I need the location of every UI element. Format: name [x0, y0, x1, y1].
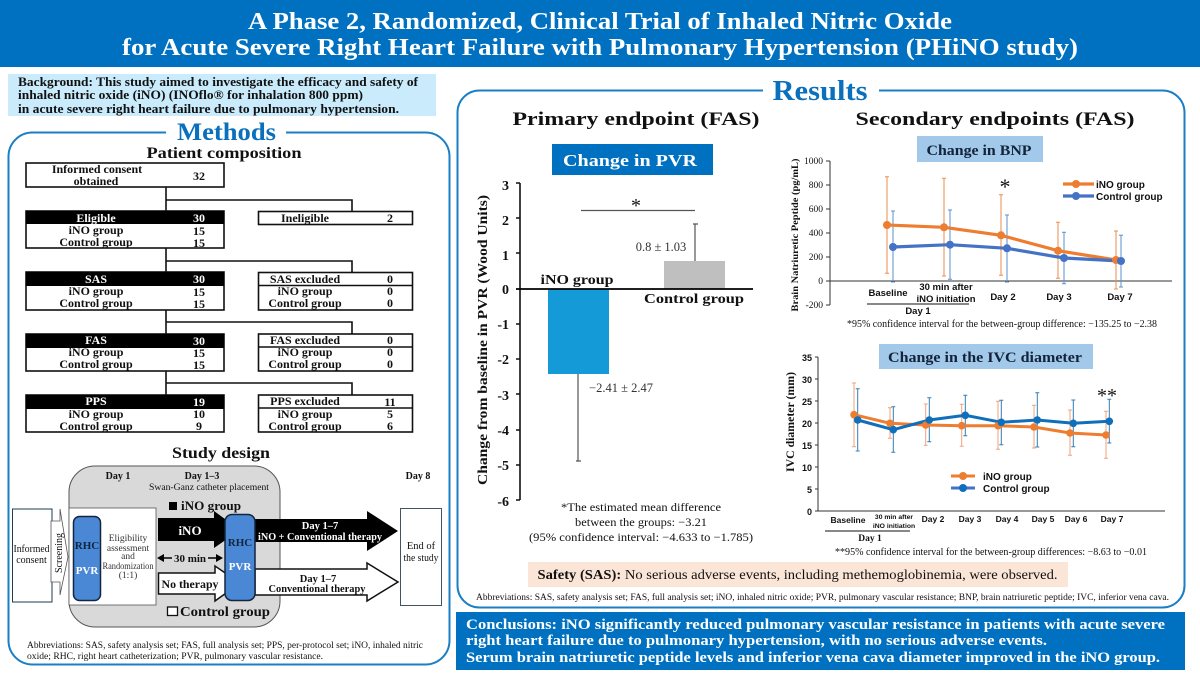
flow chart: patient composition: SAS excluded	[270, 272, 340, 286]
flow chart: patient composition: Control group	[268, 419, 342, 433]
diagram: study design: PVR	[229, 561, 252, 573]
diagram: study design: assessment	[107, 544, 149, 554]
conclusions: Serum brain natriuretic peptide levels and inferior vena cava diameter improved in the iNO group.	[466, 650, 1160, 666]
line chart: change in BNP: 600	[809, 205, 823, 215]
line chart: change in IVC diameter: 15	[802, 441, 812, 451]
panel: methods	[8, 119, 450, 664]
diagram: study design: consent	[16, 555, 47, 566]
flow chart: patient composition: 5	[387, 407, 393, 421]
flow chart: patient composition: 0	[387, 284, 393, 298]
line chart: change in BNP: Baseline	[868, 288, 908, 299]
line chart: change in IVC diameter	[785, 353, 1165, 544]
heading: methods: Methods	[177, 119, 276, 146]
diagram: study design: iNO group	[181, 498, 241, 513]
bar chart: change in PVR: *	[631, 195, 641, 217]
flow chart: patient composition: SAS	[85, 272, 107, 286]
diagram: study design: iNO + Conventional therapy	[258, 532, 383, 543]
diagram: study design	[12, 466, 442, 627]
diagram: study design: RHC	[228, 537, 252, 549]
line chart: change in BNP: 400	[809, 229, 823, 239]
flow chart: patient composition: 9	[196, 419, 202, 433]
abbreviations: results: Abbreviations: SAS, safety analysis set; FAS, full analysis set; iNO, inhaled nitric oxide; PVR, pulmonary vascular resistance; BNP, brain natriuretic peptide; IVC, inferior vena cava.	[476, 592, 1169, 603]
line chart: change in BNP: Day 2	[990, 292, 1016, 303]
line chart: change in BNP: Control group	[1096, 192, 1163, 203]
bar chart: change in PVR: 2	[502, 214, 509, 229]
footnote: PVR difference: (95% confidence interval: −4.633 to −1.785)	[529, 530, 753, 544]
bar chart: change in PVR: -6	[497, 495, 509, 510]
abbreviations: methods: oxide; RHC, right heart catheterization; PVR, pulmonary vascular resistance.	[27, 652, 323, 662]
bar chart: change in PVR: Change from baseline in PVR (Wood Units)	[476, 195, 491, 485]
title banner	[0, 0, 1200, 67]
heading: primary endpoint: Primary endpoint (FAS)	[512, 109, 760, 130]
conclusions	[456, 612, 1185, 670]
line chart: change in BNP: 200	[809, 253, 823, 263]
diagram: study design: Screening	[54, 533, 65, 573]
line chart: change in BNP: iNO initiation	[916, 294, 976, 305]
title banner: for Acute Severe Right Heart Failure with Pulmonary Hypertension (PHiNO study)	[122, 34, 1078, 61]
line chart: change in IVC diameter: 25	[802, 397, 812, 407]
footnote: IVC confidence interval: **95% confidence interval for the between-group differences: −8.63 to −0.01	[835, 547, 1147, 558]
flow chart: patient composition: PPS excluded	[270, 394, 340, 408]
line chart: change in BNP: *	[1000, 174, 1010, 199]
heading: secondary endpoints: Secondary endpoints (FAS)	[856, 109, 1134, 130]
flow chart: patient composition: 15	[193, 285, 205, 299]
line chart: change in IVC diameter: 30 min after	[875, 514, 913, 521]
flow chart: patient composition: iNO group	[278, 284, 333, 298]
line chart: change in IVC diameter: **	[1097, 385, 1117, 407]
flow chart: patient composition: Control group	[59, 357, 133, 371]
bar chart: change in PVR: -5	[497, 459, 509, 474]
line chart: change in IVC diameter: Day 2	[922, 514, 945, 524]
bar chart: change in PVR: 0.8 ± 1.03	[636, 240, 686, 254]
line chart: change in IVC diameter: iNO initiation	[873, 523, 915, 530]
label: change in IVC diameter	[879, 344, 1093, 369]
flow chart: patient composition: Control group	[59, 296, 133, 310]
line chart: change in BNP: Day 3	[1046, 292, 1072, 303]
bar chart: change in PVR: -1	[497, 318, 509, 333]
flow chart: patient composition: 30	[193, 272, 205, 286]
line chart: change in BNP: iNO group	[1096, 180, 1145, 191]
bar chart: change in PVR: −2.41 ± 2.47	[589, 381, 653, 395]
flow chart: patient composition: 6	[387, 419, 393, 433]
flow chart: patient composition: 19	[193, 395, 205, 409]
diagram: study design: Control group	[180, 605, 270, 620]
flow chart: patient composition: 0	[387, 345, 393, 359]
flow chart: patient composition: FAS excluded	[270, 333, 340, 347]
diagram: study design: RHC	[75, 540, 99, 552]
footnote: BNP confidence interval: *95% confidence interval for the between-group difference: −135.25 to −2.38	[847, 319, 1157, 330]
line chart: change in IVC diameter: Day 3	[959, 514, 982, 524]
diagram: study design: and	[121, 552, 135, 562]
footnote: PVR difference	[529, 500, 753, 544]
diagram: study design: Day 1–7	[300, 574, 336, 585]
diagram: study design: Day 1–7	[302, 521, 338, 532]
diagram: study design: Eligibility	[109, 534, 148, 544]
flow chart: patient composition: Informed consent	[52, 162, 142, 176]
bar chart: change in PVR: 3	[502, 179, 509, 194]
line chart: change in BNP: Day 1	[905, 306, 931, 317]
flow chart: patient composition: Control group	[268, 357, 342, 371]
flow chart: patient composition: 0	[387, 272, 393, 286]
bar chart: change in PVR	[476, 179, 753, 510]
diagram: study design: Day 1	[106, 471, 130, 482]
flow chart: patient composition: Ineligible	[281, 211, 330, 225]
heading: study design: Study design	[172, 445, 270, 462]
flow chart: patient composition: Eligible	[76, 211, 116, 225]
label: change in PVR	[552, 144, 713, 175]
flow chart: patient composition: 32	[193, 169, 205, 183]
line chart: change in IVC diameter: Day 1	[858, 534, 882, 544]
flow chart: patient composition: 15	[193, 297, 205, 311]
heading: patient composition: Patient composition	[146, 145, 302, 162]
line chart: change in BNP: Brain Natriuretic Peptide (pg/mL)	[790, 158, 800, 312]
line chart: change in BNP: 30 min after	[919, 282, 973, 293]
line chart: change in IVC diameter: Day 6	[1065, 514, 1088, 524]
bar chart: change in PVR: -2	[497, 353, 509, 368]
line chart: change in BNP: 800	[809, 181, 823, 191]
flow chart: patient composition: Control group	[59, 235, 133, 249]
flow chart: patient composition: 10	[193, 407, 205, 421]
bar chart: change in PVR: -4	[497, 424, 509, 439]
label: change in BNP: Change in BNP	[926, 143, 1032, 159]
line chart: change in BNP: 1000	[804, 157, 823, 167]
diagram: study design: PVR	[76, 565, 99, 577]
label: change in BNP	[917, 136, 1043, 162]
label: change in PVR: Change in PVR	[563, 151, 698, 170]
line chart: change in IVC diameter: Baseline	[831, 515, 866, 525]
bar chart: change in PVR: iNO group	[540, 273, 614, 288]
flow chart: patient composition: 0	[387, 296, 393, 310]
flow chart: patient composition: iNO group	[69, 345, 124, 359]
line chart: change in IVC diameter: IVC diameter (mm)	[785, 372, 797, 472]
flow chart: patient composition: iNO group	[69, 223, 124, 237]
abbreviations: methods	[27, 640, 423, 662]
conclusions: Conclusions: iNO significantly reduced pulmonary vascular resistance in patients with acute severe	[466, 617, 1165, 633]
flow chart: patient composition: 15	[193, 224, 205, 238]
background text block	[8, 74, 436, 116]
bar chart: change in PVR: 1	[502, 249, 509, 264]
line chart: change in BNP	[790, 157, 1172, 317]
flow chart: patient composition: 2	[387, 211, 393, 225]
bar chart: change in PVR: Control group	[644, 292, 744, 307]
flow chart: patient composition	[26, 162, 412, 433]
diagram: study design: No therapy	[162, 577, 218, 591]
flow chart: patient composition: 15	[193, 358, 205, 372]
line chart: change in IVC diameter: Day 5	[1032, 514, 1055, 524]
flow chart: patient composition: iNO group	[278, 345, 333, 359]
flow chart: patient composition: 30	[193, 211, 205, 225]
flow chart: patient composition: 0	[387, 333, 393, 347]
line chart: change in BNP: 0	[818, 277, 823, 287]
line chart: change in IVC diameter: 0	[807, 507, 812, 517]
bar chart: change in PVR: -3	[497, 389, 509, 404]
diagram: study design: 30 min	[174, 553, 206, 565]
line chart: change in IVC diameter: 5	[807, 485, 812, 495]
diagram: study design: Day 8	[406, 471, 430, 482]
flow chart: patient composition: Control group	[268, 296, 342, 310]
background text block: in acute severe right heart failure due to pulmonary hypertension.	[18, 102, 399, 116]
line chart: change in BNP: Day 7	[1107, 292, 1133, 303]
flow chart: patient composition: PPS	[85, 394, 107, 408]
line chart: change in IVC diameter: 30	[802, 375, 812, 385]
title banner: A Phase 2, Randomized, Clinical Trial of Inhaled Nitric Oxide	[248, 8, 952, 35]
flow chart: patient composition: iNO group	[69, 284, 124, 298]
callout: safety: Safety (SAS): No serious adverse events, including methemoglobinemia, were observed.	[538, 568, 1058, 583]
diagram: study design: End of	[407, 541, 436, 552]
footnote: PVR difference: between the groups: −3.21	[575, 515, 707, 529]
conclusions: right heart failure due to pulmonary hypertension, with no serious adverse events.	[466, 633, 1047, 649]
line chart: change in IVC diameter: 35	[802, 353, 812, 363]
callout: safety	[528, 562, 1068, 587]
line chart: change in IVC diameter: 20	[802, 419, 812, 429]
flow chart: patient composition: obtained	[74, 174, 119, 188]
bar chart: change in PVR: 0	[502, 283, 509, 298]
flow chart: patient composition: Control group	[59, 419, 133, 433]
flow chart: patient composition: 15	[193, 236, 205, 250]
diagram: study design: Swan-Ganz catheter placement	[149, 483, 269, 493]
diagram: study design: (1:1)	[119, 570, 137, 581]
line chart: change in IVC diameter: Day 4	[996, 514, 1019, 524]
flow chart: patient composition: 0	[387, 357, 393, 371]
diagram: study design: the study	[404, 553, 439, 564]
footnote: PVR difference: *The estimated mean difference	[561, 500, 721, 514]
line chart: change in BNP: -200	[806, 301, 823, 311]
diagram: study design: iNO	[178, 523, 202, 538]
flow chart: patient composition: FAS	[85, 333, 107, 347]
line chart: change in IVC diameter: 10	[802, 463, 812, 473]
flow chart: patient composition: iNO group	[278, 407, 333, 421]
label: change in IVC diameter: Change in the IVC diameter	[888, 350, 1083, 366]
flow chart: patient composition: 15	[193, 346, 205, 360]
flow chart: patient composition: iNO group	[69, 407, 124, 421]
line chart: change in IVC diameter: Control group	[983, 484, 1050, 495]
diagram: study design: Conventional therapy	[268, 584, 366, 595]
background text block: inhaled nitric oxide (iNO) (INOflo® for inhalation 800 ppm)	[18, 88, 363, 102]
diagram: study design: Informed	[14, 544, 50, 555]
abbreviations: methods: Abbreviations: SAS, safety analysis set; FAS, full analysis set; PPS, per-protocol set; iNO, inhaled nitric	[27, 640, 423, 651]
line chart: change in IVC diameter: iNO group	[983, 472, 1032, 483]
panel: results	[458, 76, 1184, 608]
flow chart: patient composition: 30	[193, 334, 205, 348]
diagram: study design: Randomization	[102, 562, 154, 572]
heading: results: Results	[772, 76, 868, 107]
flow chart: patient composition: 11	[384, 395, 396, 409]
line chart: change in IVC diameter: Day 7	[1101, 514, 1124, 524]
background text block: Background: This study aimed to investigate the efficacy and safety of	[18, 75, 419, 89]
diagram: study design: Day 1–3	[185, 471, 219, 482]
